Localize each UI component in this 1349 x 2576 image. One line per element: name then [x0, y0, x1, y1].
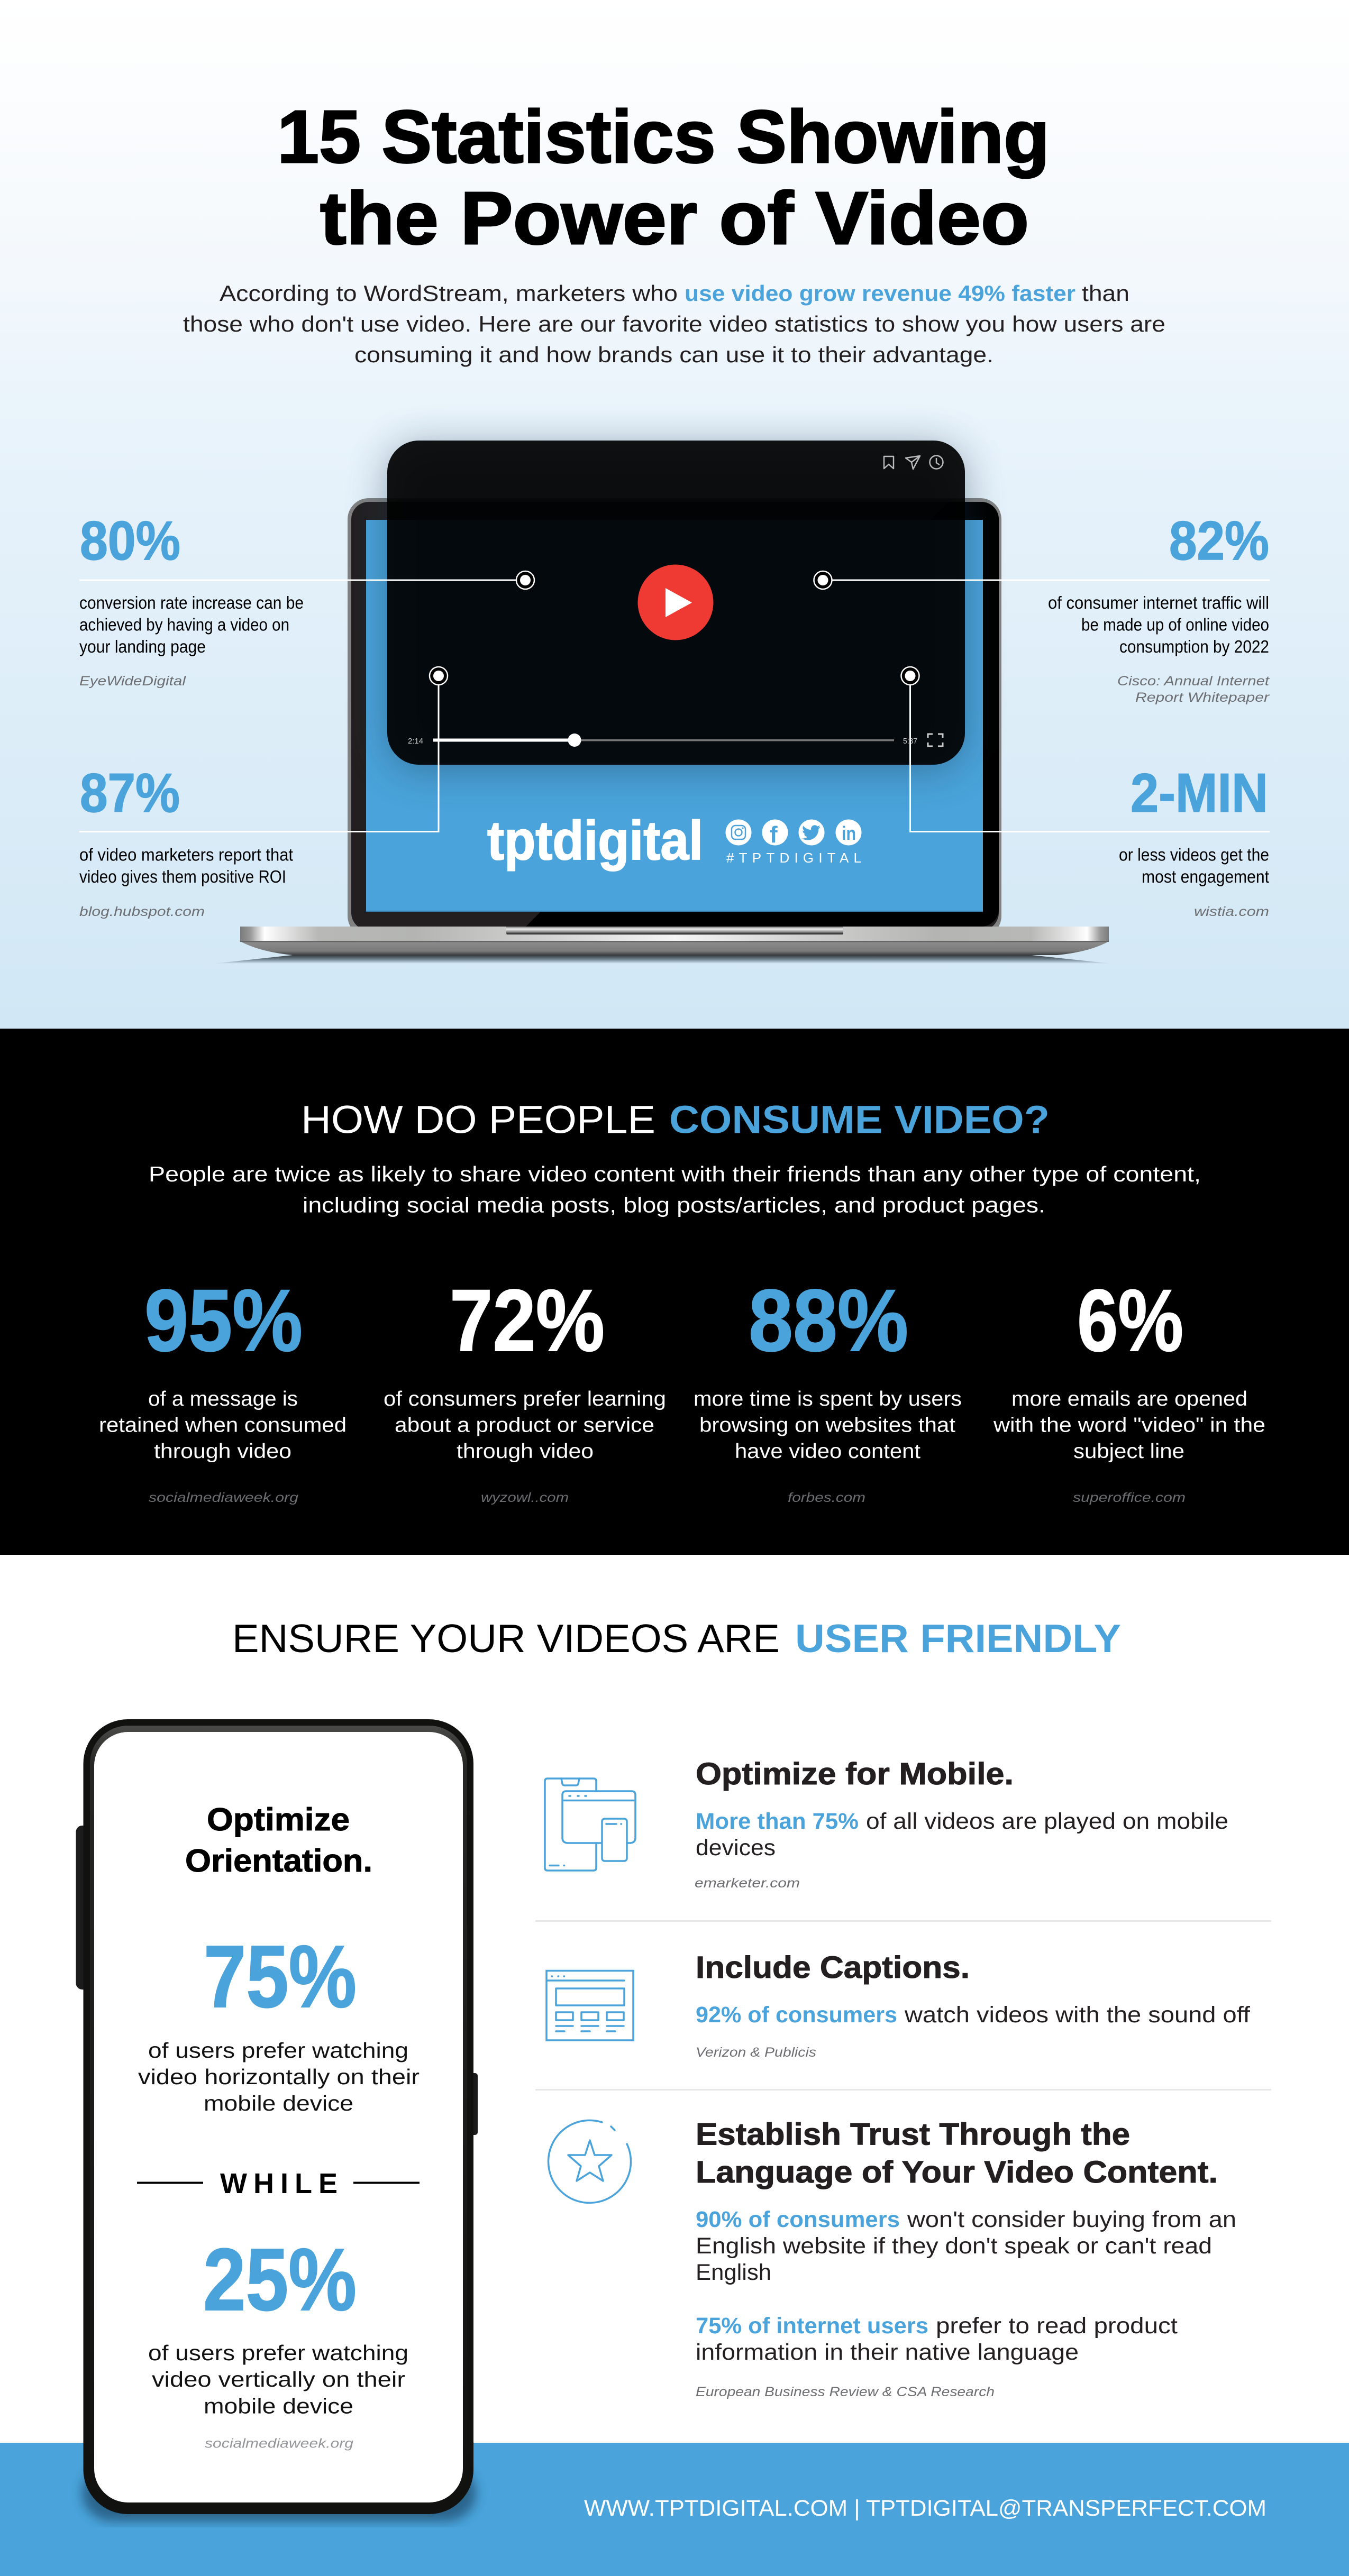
callout: 82% internet traffic: 82% — [1169, 510, 1269, 572]
stat: 6%: subject line — [1073, 1440, 1184, 1463]
stat: 72%: about a product or service — [395, 1414, 654, 1436]
icon: instagram — [726, 820, 751, 845]
stat: 88%: more time is spent by users — [694, 1388, 962, 1410]
section intro — [149, 1162, 1201, 1217]
callout: 80% conversion rate: EyeWideDigital — [79, 674, 187, 689]
tip text: won't consider buying from an — [907, 2207, 1236, 2232]
heading: ensure your videos are user friendly: ENSURE YOUR VIDEOS ARE — [232, 1616, 780, 1661]
tip text: of all videos are played on mobile — [866, 1809, 1228, 1834]
stat: 95%: socialmediaweek.org — [149, 1490, 298, 1505]
stat: 6%: with the word "video" in the — [993, 1414, 1265, 1436]
tip: include captions — [546, 1950, 1251, 2060]
heading: HOW DO PEOPLE — [301, 1098, 655, 1141]
stat: 88%: forbes.com — [788, 1490, 865, 1505]
logo: tptdigital: tptdigital — [487, 810, 703, 872]
intro text block: use video grow revenue 49% faster — [685, 281, 1075, 306]
tip text: More than 75% — [696, 1809, 859, 1834]
tip text: English — [696, 2260, 771, 2285]
callout: 80% conversion rate: conversion rate increase can be — [79, 593, 304, 612]
stat: 95% — [99, 1272, 347, 1505]
tip text: Verizon & Publicis — [696, 2045, 816, 2060]
section intro: including social media posts, blog posts/articles, and product pages. — [303, 1193, 1045, 1217]
phone heading — [185, 1802, 372, 1878]
tip text: 90% of consumers — [696, 2207, 900, 2232]
social icons — [726, 820, 861, 866]
footer contact text: WWW.TPTDIGITAL.COM | TPTDIGITAL@TRANSPERFECT.COM — [584, 2496, 1266, 2521]
phone shadow — [82, 2464, 476, 2522]
stat: 75% horizontal: 75% — [204, 1928, 357, 2026]
heading: CONSUME VIDEO? — [669, 1098, 1050, 1141]
intro text block: According to WordStream, marketers who — [220, 281, 678, 306]
stat: 6% — [993, 1272, 1265, 1505]
stat: 95%: retained when consumed — [99, 1414, 347, 1436]
callout: 2-MIN videos: 2-MIN — [1131, 763, 1268, 824]
tip text: European Business Review & CSA Research — [696, 2385, 995, 2399]
heading: ensure your videos are user friendly: USER FRIENDLY — [795, 1616, 1121, 1661]
icon: bookmark — [884, 456, 894, 469]
intro text block: those who don't use video. Here are our favorite video statistics to show you how users are — [183, 311, 1165, 336]
tip text: 75% of internet users — [696, 2313, 928, 2339]
icon: devices — [545, 1779, 635, 1871]
callout: 87% positive ROI: blog.hubspot.com — [79, 904, 205, 919]
video player panel — [387, 441, 965, 765]
tip heading: Include Captions. — [696, 1950, 970, 1985]
tip: optimize for mobile — [545, 1757, 1228, 1891]
panel: phone optimize orientation — [76, 1719, 478, 2514]
callout: 87% positive ROI: 87% — [80, 763, 180, 824]
phone heading: Orientation. — [185, 1843, 372, 1878]
tip heading: Establish Trust Through the — [696, 2117, 1130, 2151]
tip text: watch videos with the sound off — [904, 2002, 1251, 2028]
stat: 6%: 6% — [1077, 1272, 1183, 1370]
video progress bar: 5:37 — [903, 737, 917, 746]
video player shadow — [387, 446, 965, 770]
icon: linkedin: in — [842, 822, 856, 844]
stat: 75% horizontal: mobile device — [204, 2091, 353, 2115]
tip text — [696, 2207, 1236, 2399]
video progress bar — [408, 734, 917, 747]
callout: 87% positive ROI: video gives them positive ROI — [79, 867, 286, 886]
icon: clock — [930, 456, 943, 469]
hashtag: #TPTDIGITAL — [726, 850, 861, 866]
callout: 2-MIN videos: wistia.com — [1194, 904, 1269, 919]
stat: 6%: more emails are opened — [1011, 1388, 1247, 1410]
icon: linkedin — [836, 820, 861, 845]
stat: 72%: wyzowl..com — [481, 1490, 569, 1505]
panel: how do people consume video — [0, 1029, 1349, 1555]
stat: 25% vertical: mobile device — [204, 2394, 353, 2418]
stat: 88%: 88% — [749, 1272, 908, 1370]
heading — [301, 1098, 1050, 1141]
callout: 82% internet traffic: Cisco: Annual Internet — [1117, 674, 1270, 689]
callout: 2-MIN videos: or less videos get the — [1119, 845, 1269, 864]
stat: 25% vertical: 25% — [203, 2231, 357, 2329]
callout: 80% conversion rate: 80% — [80, 510, 180, 572]
tip text: devices — [696, 1835, 776, 1860]
icon: facebook — [762, 820, 788, 848]
callout: 2-MIN videos — [901, 667, 1270, 919]
icon: facebook: f — [770, 822, 778, 848]
stat: 88%: have video content — [735, 1440, 920, 1463]
intro text block — [183, 281, 1165, 367]
phone body — [84, 1719, 473, 2514]
stat: 25% vertical: socialmediaweek.org — [205, 2436, 353, 2451]
laptop screen — [366, 520, 983, 912]
callout: 82% internet traffic — [814, 510, 1270, 705]
laptop lid and bezel — [348, 498, 1001, 937]
callout: 87% positive ROI — [79, 667, 448, 919]
title — [277, 95, 1050, 260]
callout: 80% conversion rate: your landing page — [79, 637, 206, 656]
icon: twitter — [799, 820, 824, 845]
panel: hero background — [0, 0, 1349, 1029]
callout: 87% positive ROI: of video marketers report that — [79, 845, 293, 864]
stat: 88%: browsing on websites that — [699, 1414, 955, 1436]
tip text — [695, 1809, 1228, 1891]
icon: browser captions — [546, 1970, 633, 2040]
callout: 82% internet traffic: of consumer internet traffic will — [1048, 593, 1269, 612]
stat: 72% — [384, 1272, 666, 1505]
illustration: laptop with video player — [214, 441, 1111, 964]
panel: user friendly background — [0, 1555, 1349, 2443]
tip text: emarketer.com — [695, 1876, 800, 1891]
icon: star in circle — [549, 2120, 631, 2203]
intro text block: consuming it and how brands can use it to their advantage. — [354, 342, 993, 367]
stat: 25% vertical: of users prefer watching — [148, 2341, 408, 2365]
phone side buttons — [76, 1826, 478, 2135]
while divider: WHILE — [220, 2168, 338, 2199]
stat: 95%: of a message is — [148, 1388, 298, 1410]
panel: footer — [0, 2443, 1349, 2576]
title: 15 Statistics Showing — [277, 95, 1050, 178]
stat: 72%: 72% — [450, 1272, 605, 1370]
stat: 88% — [694, 1272, 962, 1505]
stat: 25% vertical — [148, 2231, 408, 2451]
stat: 75% horizontal: video horizontally on their — [138, 2065, 420, 2089]
title: the Power of Video — [320, 176, 1029, 260]
video progress bar: 2:14 — [408, 737, 423, 746]
phone heading: Optimize — [207, 1802, 350, 1837]
tip text: English website if they don't speak or can't read — [696, 2233, 1212, 2259]
tip text: information in their native language — [696, 2340, 1079, 2365]
icon: send — [906, 456, 920, 469]
intro text block: than — [1082, 281, 1129, 306]
callout: 82% internet traffic: consumption by 2022 — [1119, 637, 1269, 656]
callout: 80% conversion rate — [79, 510, 534, 689]
tip text — [696, 2002, 1251, 2060]
stat: 95%: 95% — [144, 1272, 303, 1370]
tip: establish trust — [549, 2117, 1236, 2399]
callout: 80% conversion rate: achieved by having a video on — [79, 615, 289, 635]
stat: 72%: of consumers prefer learning — [384, 1388, 666, 1410]
tip text: 92% of consumers — [696, 2002, 897, 2028]
callout: 82% internet traffic: Report Whitepaper — [1135, 690, 1270, 705]
callout: 82% internet traffic: be made up of online video — [1081, 615, 1269, 635]
tip heading — [696, 2117, 1218, 2189]
icon: play button — [638, 565, 713, 640]
while divider — [137, 2168, 420, 2199]
callout: 2-MIN videos: most engagement — [1142, 867, 1269, 886]
section intro: People are twice as likely to share video content with their friends than any other type of content, — [149, 1162, 1201, 1186]
stat: 95%: through video — [154, 1440, 291, 1463]
stat: 75% horizontal: of users prefer watching — [148, 2038, 408, 2062]
tip text: prefer to read product — [936, 2313, 1178, 2339]
heading: ensure your videos are user friendly — [232, 1616, 1121, 1661]
stat: 72%: through video — [457, 1440, 594, 1463]
laptop base — [214, 927, 1111, 964]
icon: fullscreen — [928, 734, 943, 746]
stat: 6%: superoffice.com — [1073, 1490, 1186, 1505]
stat: 25% vertical: video vertically on their — [152, 2367, 405, 2391]
tip heading: Language of Your Video Content. — [696, 2155, 1218, 2189]
stat: 75% horizontal — [138, 1928, 420, 2115]
tip heading: Optimize for Mobile. — [696, 1757, 1014, 1791]
